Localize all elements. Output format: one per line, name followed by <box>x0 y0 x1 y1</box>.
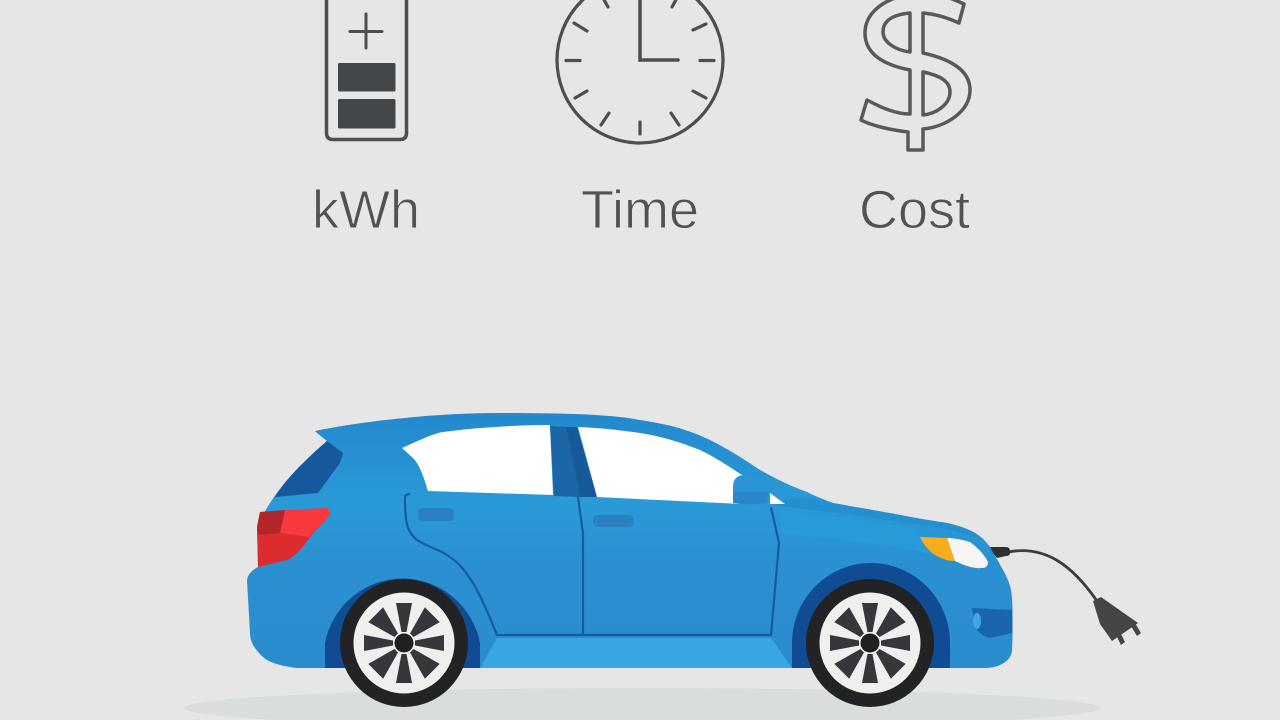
car <box>247 413 1013 707</box>
label: Time: Time <box>581 180 699 240</box>
icon: battery <box>326 0 406 140</box>
front side window <box>578 427 742 504</box>
label: kWh: kWh <box>312 180 420 240</box>
label: Cost: Cost <box>859 180 970 240</box>
rear wheel <box>325 579 480 707</box>
fog light <box>973 613 981 629</box>
rear window <box>275 441 343 497</box>
door handles <box>418 508 634 527</box>
door lines <box>405 494 779 635</box>
headlight <box>920 537 988 568</box>
icon: dollar sign <box>861 0 970 150</box>
ground shadow <box>184 688 1100 720</box>
side mirror <box>733 475 768 504</box>
vent window <box>770 493 785 504</box>
icon: clock <box>557 0 723 143</box>
front fender highlight <box>779 512 945 558</box>
tail light <box>257 508 330 567</box>
hood upper shade <box>775 498 985 541</box>
plug head <box>1093 597 1141 645</box>
charging cable and plug <box>990 547 1141 645</box>
rear side window <box>402 425 553 495</box>
rocker panel <box>480 638 792 668</box>
car body <box>247 413 1013 668</box>
plug connector <box>990 547 1010 558</box>
front wheel <box>792 563 950 707</box>
door pillar <box>550 426 597 497</box>
front air intake <box>972 608 1012 638</box>
cable <box>1008 551 1097 601</box>
